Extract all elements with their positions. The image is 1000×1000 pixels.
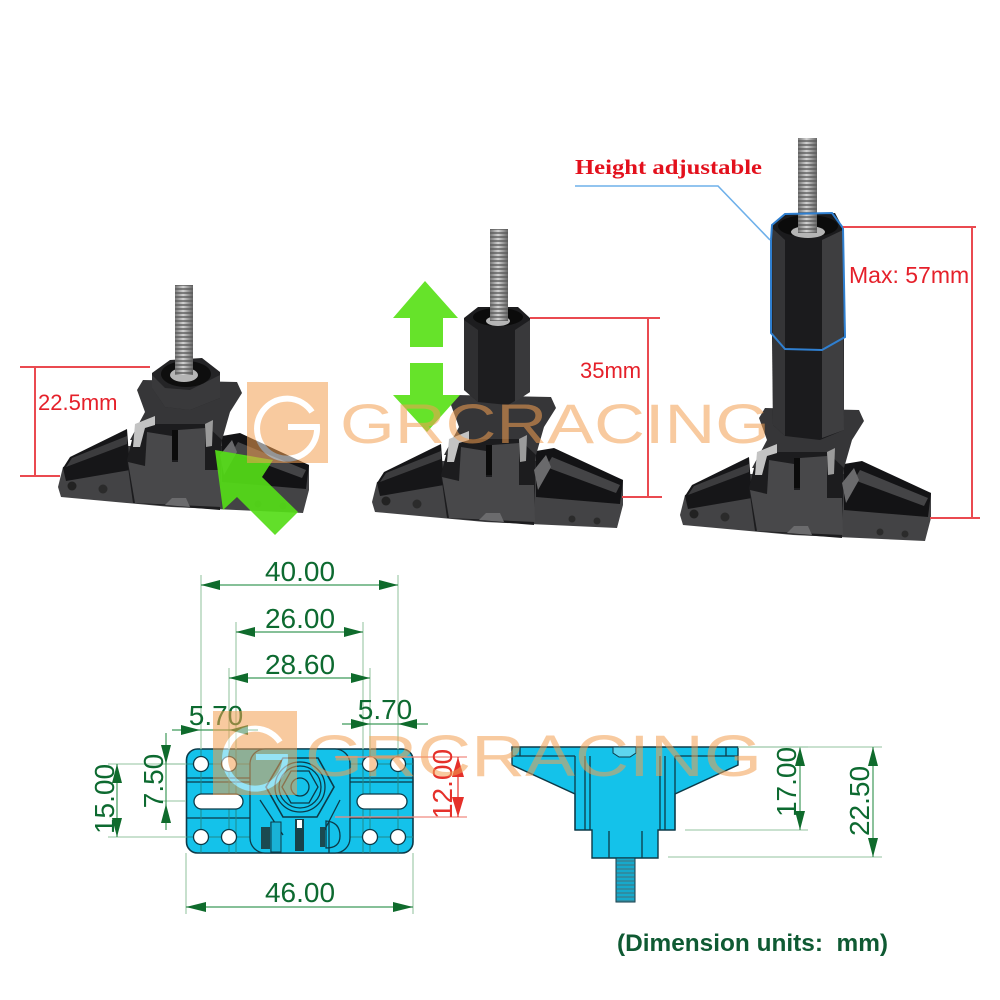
units note: (Dimension units: mm) bbox=[617, 930, 888, 957]
projected dimension lines on plate bbox=[186, 749, 413, 853]
dimension: 46.00: 46.00 bbox=[265, 877, 335, 908]
dimension: 12.00 red bbox=[335, 749, 467, 819]
photo: mount at maximum height bbox=[680, 138, 931, 541]
dimension: 22.50 bbox=[668, 747, 882, 857]
dimension: 7.50: 7.50 bbox=[138, 754, 169, 808]
dimension: 46.00 bbox=[186, 853, 413, 914]
dimension: 35mm: 35mm bbox=[580, 358, 641, 383]
dimension: 40.00: 40.00 bbox=[265, 556, 335, 587]
dimension: 26.00: 26.00 bbox=[265, 603, 335, 634]
plate bbox=[186, 749, 413, 853]
base mount 1 bbox=[58, 380, 309, 513]
watermark: upper logo bbox=[247, 382, 770, 463]
dimension: 17.00: 17.00 bbox=[771, 747, 802, 817]
top view drawing bbox=[186, 749, 413, 853]
arrow: green up and down bbox=[393, 281, 460, 432]
callout: height adjustable bbox=[575, 155, 770, 240]
dimension: 5.70 right: 5.70 bbox=[358, 694, 412, 725]
side view drawing bbox=[512, 747, 738, 902]
dimension: 7.50 bbox=[138, 733, 186, 830]
base mount 3 bbox=[680, 408, 931, 541]
dimension: 22.50: 22.50 bbox=[844, 766, 875, 836]
watermark: lower logo bbox=[213, 711, 762, 795]
dimension: 28.60: 28.60 bbox=[265, 649, 335, 680]
dimension: 12.00 red: 12.00 bbox=[427, 749, 458, 819]
base mount 2 bbox=[372, 395, 623, 528]
dimension: 5.70 left bbox=[172, 700, 258, 735]
dimension: 35mm bbox=[530, 318, 662, 497]
dimension: 17.00 bbox=[685, 747, 808, 830]
dimension: 15.00: 15.00 bbox=[89, 764, 120, 834]
mounting holes bbox=[194, 756, 407, 844]
center body bbox=[250, 749, 350, 853]
bolt 3 bbox=[798, 138, 817, 233]
dimension: 22.5mm: 22.5mm bbox=[38, 390, 117, 415]
bolt 1 bbox=[175, 285, 193, 333]
blue outline on telescoping sleeve bbox=[771, 213, 845, 350]
dimension: 26.00 bbox=[236, 603, 363, 749]
arrow: green diagonal push bbox=[215, 450, 298, 535]
hex nut bbox=[266, 758, 334, 817]
dimension: 15.00 bbox=[89, 764, 186, 837]
watermark: lower logo: GRCRACING bbox=[305, 724, 762, 789]
dimension: Max 57mm bbox=[843, 227, 980, 518]
dimension: 5.70 right bbox=[342, 694, 428, 729]
locking nut 1 bbox=[152, 300, 220, 410]
watermark: upper logo: GRCRACING bbox=[340, 392, 770, 455]
callout: height adjustable: Height adjustable bbox=[575, 155, 762, 179]
dimension: 5.70 left: 5.70 bbox=[189, 700, 243, 731]
hex column 3 bbox=[772, 205, 844, 440]
dimension: Max 57mm: Max: 57mm bbox=[849, 262, 969, 288]
photo: mount at mid height bbox=[372, 229, 623, 528]
dimension: 22.5mm bbox=[20, 367, 150, 476]
dimension: 40.00 bbox=[201, 556, 398, 749]
dimension: 28.60 bbox=[229, 649, 370, 749]
bolt 2 bbox=[490, 229, 508, 324]
hex column 2 bbox=[464, 295, 530, 405]
photo: mount at minimum height bbox=[58, 285, 309, 513]
